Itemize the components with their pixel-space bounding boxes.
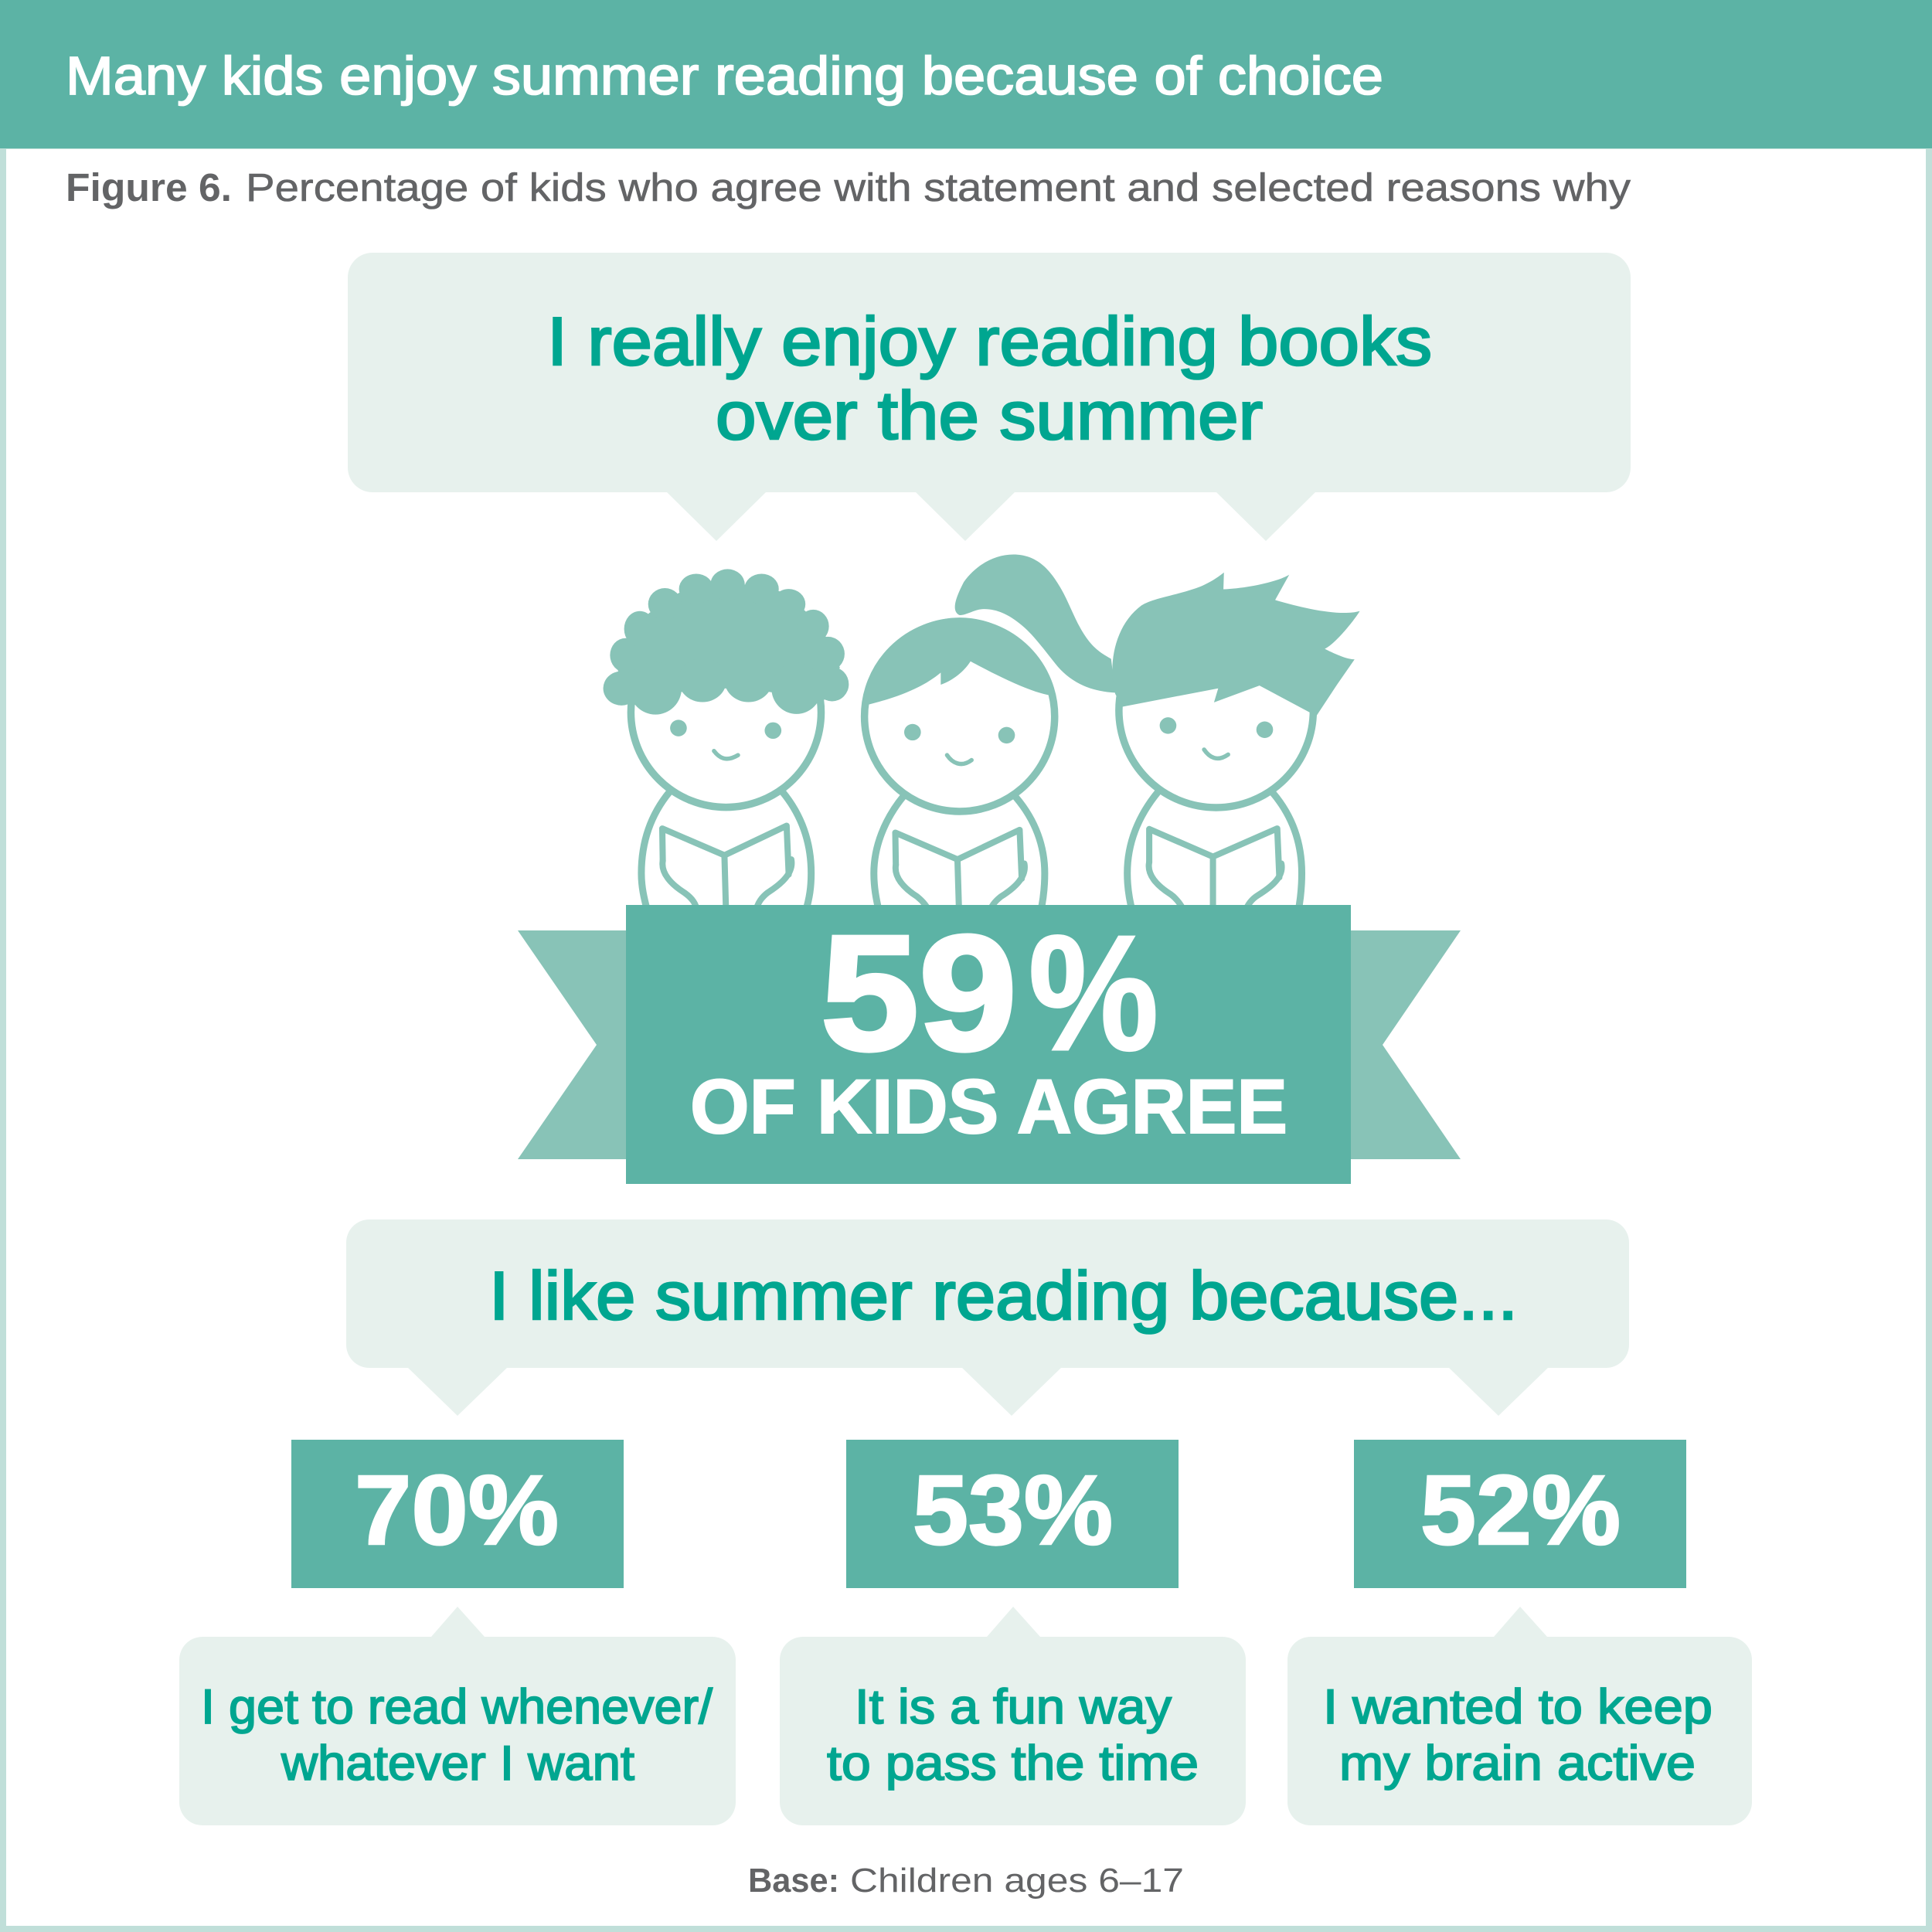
reason bubble: brain active: my brain active <box>1339 1736 1696 1791</box>
stat label: OF KIDS AGREE <box>690 1063 1287 1149</box>
figure caption: Figure 6. <box>66 165 232 209</box>
statement text: over the summer <box>716 377 1263 454</box>
reason bubble: fun way <box>780 1607 1246 1825</box>
stat box: 53%: 53% <box>913 1455 1113 1566</box>
title: Many kids enjoy summer reading because of choice <box>66 46 1383 106</box>
ribbon: 59% of kids agree <box>518 901 1461 1184</box>
big stat: 59 <box>821 901 1017 1084</box>
header banner <box>0 0 1932 148</box>
reason bubble: read whenever: whatever I want <box>281 1736 635 1791</box>
kid with spiky hair <box>1112 573 1360 912</box>
speech bubble: statement <box>348 253 1631 541</box>
reason bubble: fun way: It is a fun way <box>855 1680 1172 1734</box>
illustration: three kids reading <box>604 554 1360 912</box>
statement text <box>547 303 1432 454</box>
base note: Children ages 6–17 <box>850 1862 1184 1900</box>
ribbon tail right <box>1349 930 1461 1159</box>
kid with curly hair <box>604 569 849 912</box>
stat box: 70% <box>291 1440 624 1588</box>
kid with ponytail <box>864 554 1115 912</box>
stat box: 53% <box>846 1440 1179 1588</box>
reason bubble: brain active: I wanted to keep <box>1323 1680 1713 1734</box>
base note <box>748 1862 1184 1900</box>
base note: Base: <box>748 1862 839 1900</box>
big stat <box>821 901 1158 1084</box>
stat box: 70%: 70% <box>355 1455 559 1566</box>
ribbon tail left <box>518 930 628 1159</box>
big stat: % <box>1029 901 1158 1084</box>
reason bubble: read whenever: I get to read whenever/ <box>201 1680 713 1734</box>
reason bubble: fun way: to pass the time <box>827 1736 1199 1791</box>
figure caption: Percentage of kids who agree with statement and selected reasons why <box>246 165 1631 209</box>
statement text: I really enjoy reading books <box>547 303 1432 379</box>
reason bubble: brain active <box>1287 1607 1752 1825</box>
speech bubble: reasons heading <box>346 1219 1629 1416</box>
stat box: 52%: 52% <box>1420 1455 1621 1566</box>
reasons heading text: I like summer reading because... <box>489 1257 1518 1334</box>
reason bubble: read whenever <box>179 1607 736 1825</box>
stat box: 52% <box>1354 1440 1686 1588</box>
